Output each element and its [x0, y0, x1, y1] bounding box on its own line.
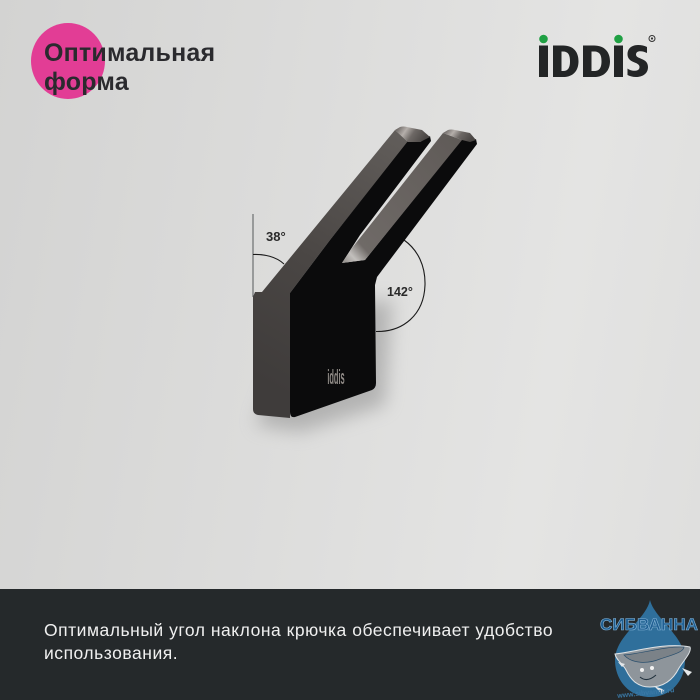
website: www.sibvanna.ru — [616, 687, 675, 700]
water drop — [615, 600, 685, 697]
hook first arm tip — [395, 126, 430, 142]
angle label: 142 degrees: 142° — [387, 285, 413, 299]
angle label: 38 degrees: 38° — [266, 229, 286, 244]
pink circle behind heading — [31, 23, 105, 99]
bathtub legs — [618, 662, 692, 694]
bathtub — [615, 646, 690, 687]
bottom caption band — [0, 589, 700, 700]
title: форма — [44, 68, 129, 96]
engraved logo on plate: iddis — [327, 367, 345, 389]
brand logo: IDDIS — [539, 34, 656, 77]
angle line: 38 degrees — [253, 214, 284, 297]
caption text: Оптимальный угол наклона крючка обеспечивает удобство использования. — [44, 620, 553, 663]
hook shadow — [256, 300, 392, 432]
title — [44, 39, 215, 96]
hook black body with prongs and front plate — [290, 136, 477, 417]
brand name: СИБВАННА — [600, 615, 698, 634]
watermark: Sibvanna logo — [600, 600, 698, 700]
title: Оптимальная — [44, 39, 215, 67]
hook body — [253, 126, 477, 418]
angle arc: 142 degrees — [376, 240, 425, 332]
hook side and first arm gunmetal face — [253, 130, 408, 418]
hook second arm tip — [443, 130, 476, 142]
hook second arm inner face — [342, 133, 462, 263]
